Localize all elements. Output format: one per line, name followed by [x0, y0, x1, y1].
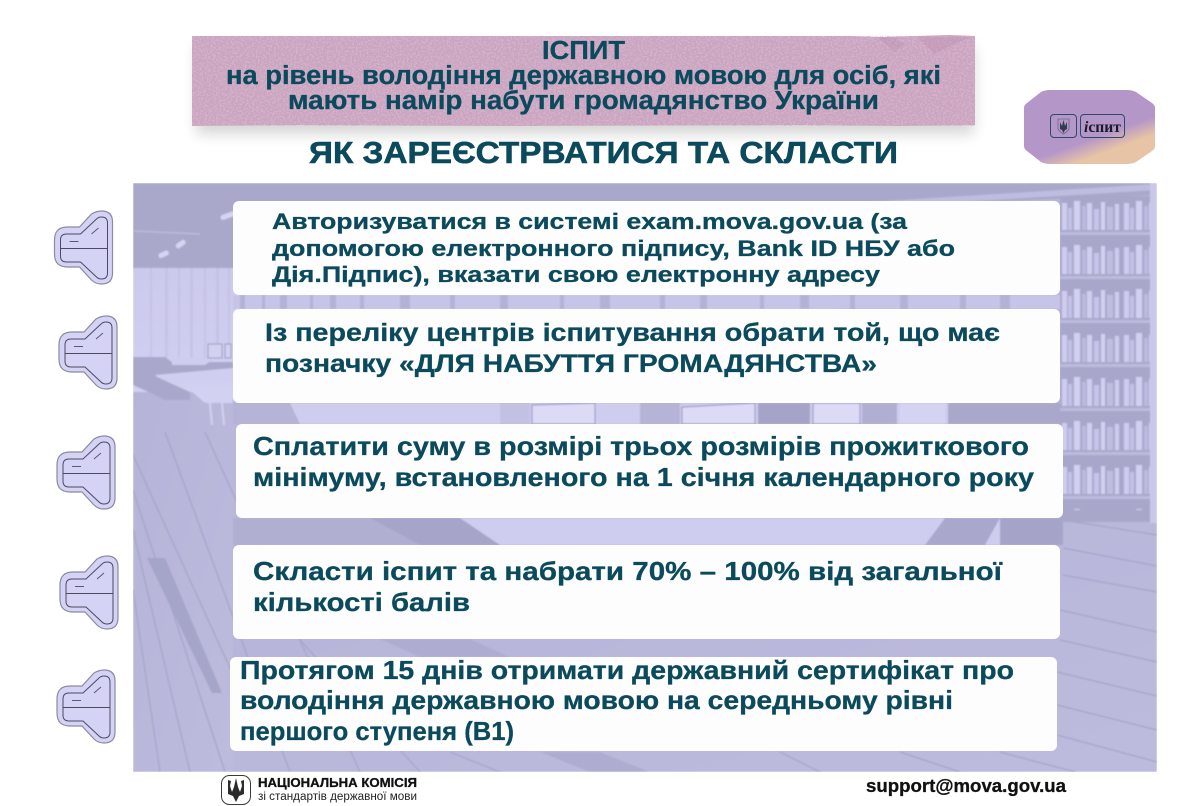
card 4	[233, 545, 1060, 639]
card 2	[233, 309, 1060, 403]
icon: megaphone 5	[57, 670, 115, 743]
card 4: Скласти іспит та набрати 70% – 100% від загальної	[253, 556, 1003, 586]
footer email: support@mova.gov.ua	[866, 776, 1067, 796]
background photo panel	[133, 183, 1157, 772]
card 5: Протягом 15 днів отримати державний сертифікат про	[240, 655, 1014, 685]
icon: megaphone 1	[54, 211, 112, 284]
card 1	[233, 201, 1060, 295]
footer emblem	[222, 776, 250, 804]
card 2: Із переліку центрів іспитування обрати той, що має	[265, 319, 1000, 347]
title banner	[192, 35, 975, 134]
title text: на рівень володіння державною мовою для осіб, які	[226, 62, 941, 90]
card 4: кількості балів	[253, 587, 470, 617]
footer organisation name	[258, 775, 417, 803]
card 3: мінімуму, встановленого на 1 січня календарного року	[253, 462, 1035, 492]
icon: megaphone 3	[57, 436, 115, 509]
card 2: позначку «ДЛЯ НАБУТТЯ ГРОМАДЯНСТВА»	[265, 350, 877, 378]
curtain wall	[133, 268, 237, 397]
floorboards	[133, 432, 1157, 772]
ceiling	[133, 183, 1157, 268]
strip between cards 3 and 4	[233, 518, 430, 545]
icon: megaphone 4	[60, 556, 118, 629]
card 5: володіння державною мовою на середньому рівні	[240, 685, 953, 715]
desks at left	[133, 357, 233, 400]
bookshelves	[1060, 196, 1150, 520]
card 1: допомогою електронного підпису, Bank ID НБУ або	[272, 236, 955, 261]
footer organisation name: НАЦІОНАЛЬНА КОМІСІЯ	[258, 775, 417, 790]
logo badge: іспит	[1084, 119, 1121, 136]
card 5: першого ступеня (В1)	[240, 716, 514, 746]
heading: ЯК ЗАРЕЄСТРВАТИСЯ ТА СКЛАСТИ	[309, 135, 898, 170]
footer organisation name: зі стандартів державної мови	[258, 791, 417, 803]
card 1: Дія.Підпис), вказати свою електронну адресу	[272, 262, 881, 287]
title text	[226, 37, 941, 115]
floor	[133, 392, 198, 399]
logo badge	[1024, 90, 1155, 164]
icon: megaphone 2	[59, 316, 117, 389]
card 3: Сплатити суму в розмірі трьох розмірів прожиткового	[253, 431, 1029, 461]
card 1: Авторизуватися в системі exam.mova.gov.ua (за	[272, 209, 908, 234]
card 5	[230, 655, 1057, 751]
title text: мають намір набути громадянство України	[288, 87, 879, 115]
card 3	[236, 424, 1063, 518]
desks and monitors strip	[290, 403, 948, 424]
strip between cards 1 and 2	[834, 295, 1060, 309]
title text: ІСПИТ	[542, 37, 625, 65]
